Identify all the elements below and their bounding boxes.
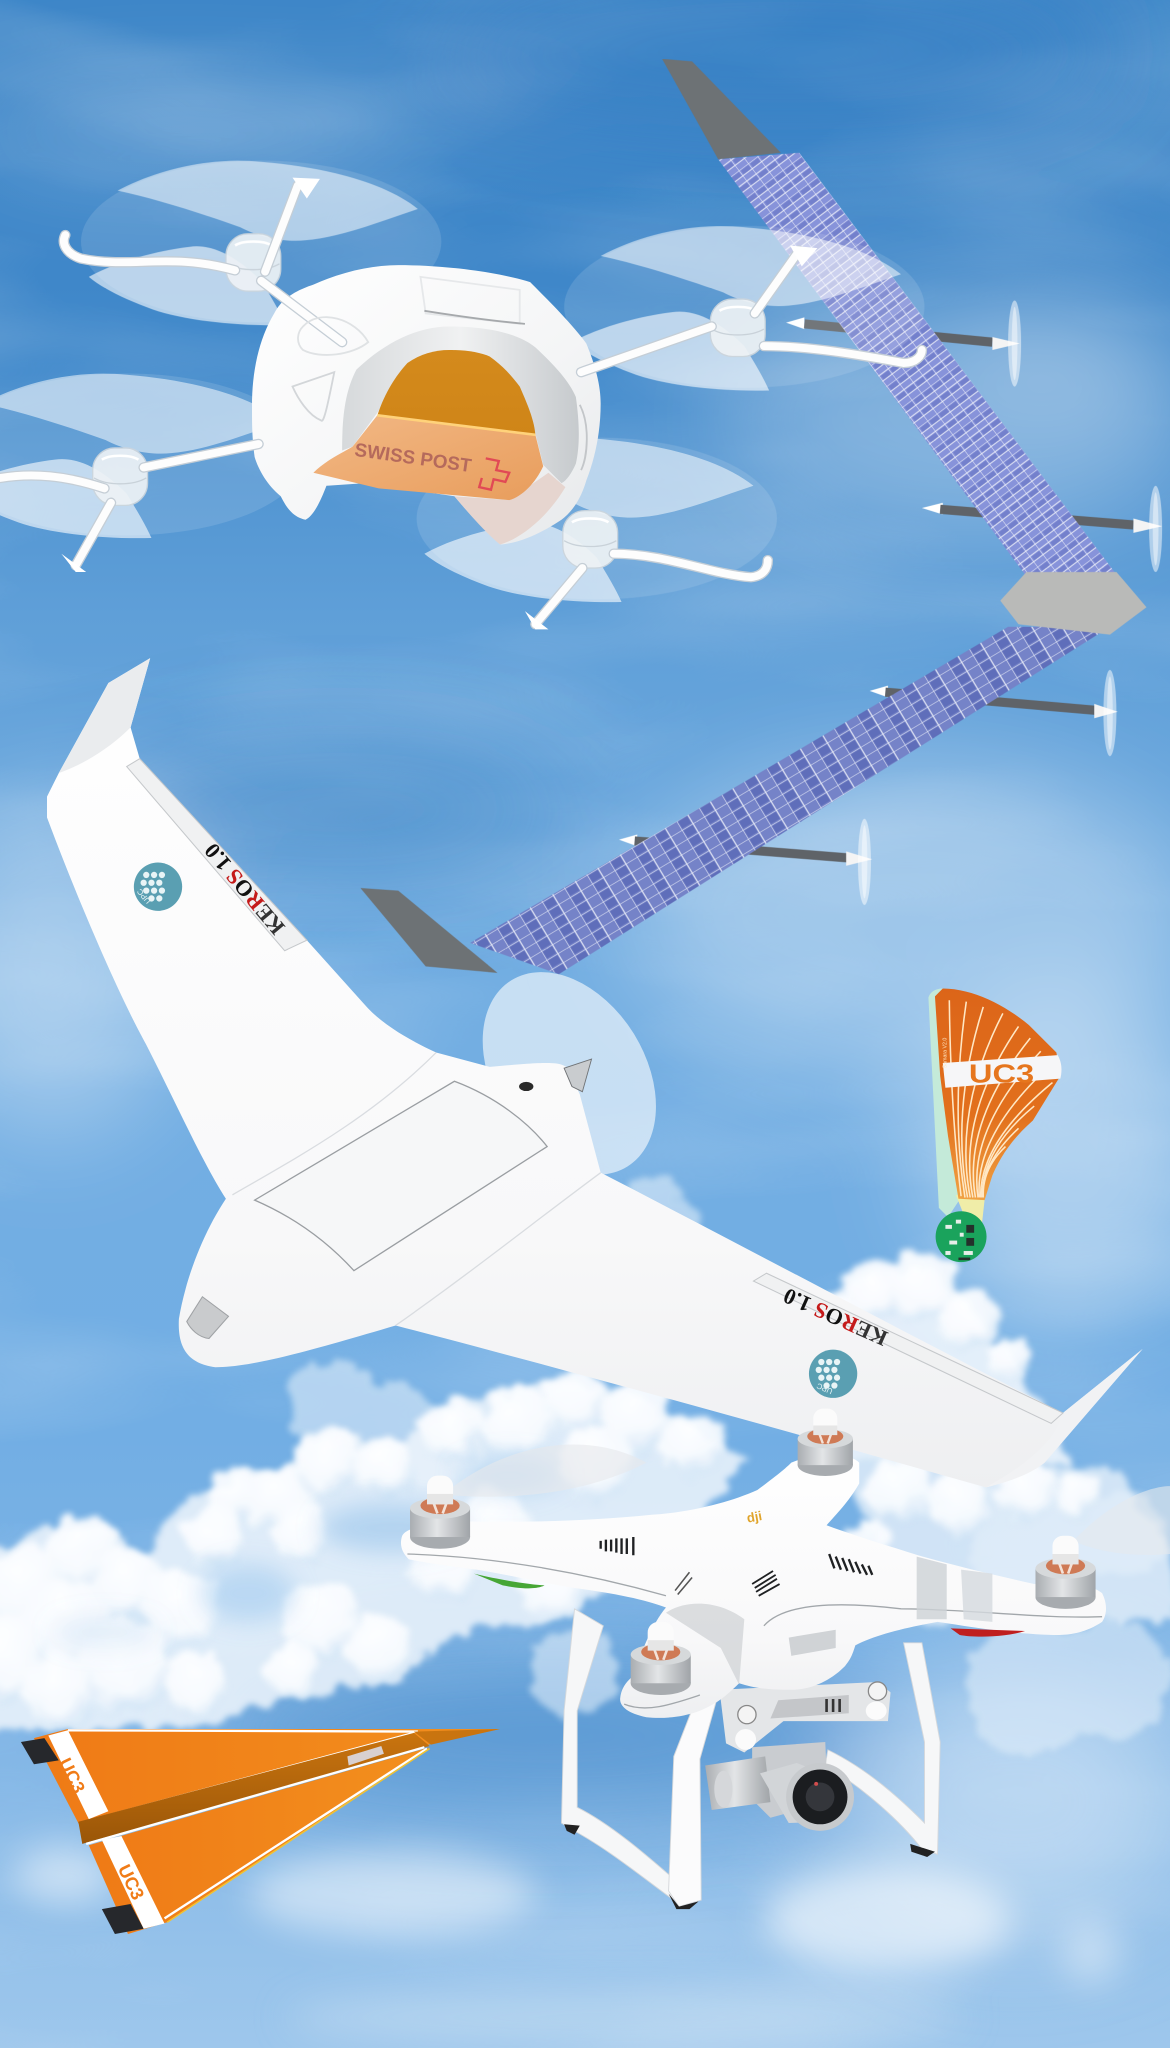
skid foot right <box>910 1844 935 1857</box>
right landing leg <box>825 1643 940 1854</box>
motor boom 1 <box>786 300 1021 387</box>
UPC logo left <box>134 863 182 911</box>
winglet right <box>986 1349 1143 1487</box>
main cloud puffs <box>0 1250 1101 1728</box>
ventilation slots <box>601 1537 872 1596</box>
yellow lower edge <box>167 1749 430 1922</box>
clear substrate strip <box>928 989 958 1217</box>
orange paper-plane drone <box>21 1729 500 1934</box>
gimbal plate <box>719 1682 891 1752</box>
wing label strip right <box>753 1273 1063 1423</box>
motor left <box>410 1476 470 1549</box>
upper wing white edge <box>68 1730 418 1823</box>
parcel label: SWISS POST <box>353 440 473 477</box>
lower grey winglet <box>360 888 498 973</box>
KEROS 1.0 label left: KEROS 1.0 <box>199 839 290 940</box>
centre pod <box>1000 572 1146 635</box>
rotor blur top-left <box>81 161 441 325</box>
shell seams and vents <box>292 277 587 470</box>
upper solar wing panel <box>718 153 1116 575</box>
wing and fuselage <box>47 658 1143 1487</box>
cumulus cloud bank <box>0 1173 1170 1752</box>
solar-powered long-wing aircraft <box>360 59 1162 974</box>
payload hatch <box>255 1081 547 1271</box>
cargo interior <box>377 350 535 435</box>
camera <box>705 1742 854 1831</box>
central fold <box>78 1733 430 1844</box>
nose tip <box>414 1729 500 1745</box>
white bar upper <box>48 1730 108 1819</box>
motor boom 4 <box>619 819 872 905</box>
KEROS 1.0 label right: KEROS 1.0 <box>780 1283 891 1351</box>
delivery quadcopter <box>0 161 925 629</box>
spinner <box>564 1059 592 1092</box>
front arm shade <box>666 1604 744 1685</box>
rotor blur bottom-right <box>417 437 777 602</box>
arms and legs <box>0 185 922 624</box>
motor hubs <box>93 234 765 568</box>
body seam lines <box>407 1554 1102 1708</box>
winglet left <box>59 658 150 773</box>
front landing leg <box>669 1690 719 1907</box>
flexible leaf sensor <box>928 989 1061 1262</box>
black servo tab upper <box>21 1738 59 1764</box>
propeller disc <box>447 940 692 1207</box>
rotor blur top-right <box>564 226 925 391</box>
black servo tab lower <box>102 1904 144 1934</box>
logo on leaf band: UC3 <box>969 1059 1034 1089</box>
nose intake <box>187 1297 229 1339</box>
white bar lower <box>102 1836 165 1929</box>
grey rim around the cargo opening <box>342 326 579 483</box>
lower wing <box>89 1747 430 1934</box>
UPC logo left: UPC <box>135 887 153 905</box>
parcel front <box>313 415 543 500</box>
lower wing white edges <box>86 1747 427 1918</box>
motor boom 2 <box>922 486 1162 572</box>
sensor port <box>519 1082 533 1091</box>
KEROS flying wing drone <box>47 658 1143 1487</box>
skid foot front <box>669 1894 699 1909</box>
rear landing leg <box>561 1609 682 1900</box>
motor right <box>1036 1536 1096 1609</box>
fuselage seams <box>232 1053 601 1325</box>
blue shadow pockets inside the clouds <box>52 1457 561 1648</box>
yellow connector <box>956 1195 985 1224</box>
body shell <box>401 1455 1106 1718</box>
landing feet <box>61 178 817 629</box>
battery on fold <box>347 1746 384 1766</box>
skid foot rear <box>564 1824 580 1835</box>
hull shell <box>252 265 601 545</box>
upper wing <box>34 1729 500 1826</box>
battery band <box>917 1557 947 1619</box>
sensor trace lines <box>949 1000 1052 1197</box>
UPC logo right: UPC <box>815 1381 834 1396</box>
circuit board <box>936 1211 987 1262</box>
rotor blur left <box>451 1444 646 1497</box>
wing label strip left <box>127 759 307 951</box>
rotor blur right <box>1073 1486 1170 1555</box>
parcel highlight edge <box>377 415 535 435</box>
lower bar logo: UC3 <box>114 1861 149 1903</box>
swiss cross <box>479 458 509 490</box>
red LED <box>951 1628 1025 1637</box>
motor front <box>631 1622 691 1695</box>
camera bay vent <box>789 1630 836 1656</box>
orange leaf <box>935 989 1060 1200</box>
pale rear cloud layer <box>289 1173 1170 1752</box>
upper grey winglet <box>662 59 781 159</box>
lower cargo peach panel <box>454 473 565 545</box>
camera quadcopter <box>401 1409 1170 1909</box>
white logo band <box>943 1055 1061 1088</box>
upper bar logo: UC3 <box>55 1754 90 1797</box>
leaf side print: Samara V2.0 <box>943 1038 949 1068</box>
battery band 2 <box>961 1570 992 1622</box>
green LED <box>474 1574 545 1588</box>
continuous cloud mass <box>0 1270 1170 1730</box>
rotor blur bottom-left <box>0 373 307 538</box>
motor rear <box>798 1409 853 1476</box>
dji logo: dji <box>746 1508 763 1526</box>
lower solar wing panel <box>470 627 1110 974</box>
motor boom 3 <box>870 670 1118 756</box>
UPC logo right <box>809 1350 857 1398</box>
